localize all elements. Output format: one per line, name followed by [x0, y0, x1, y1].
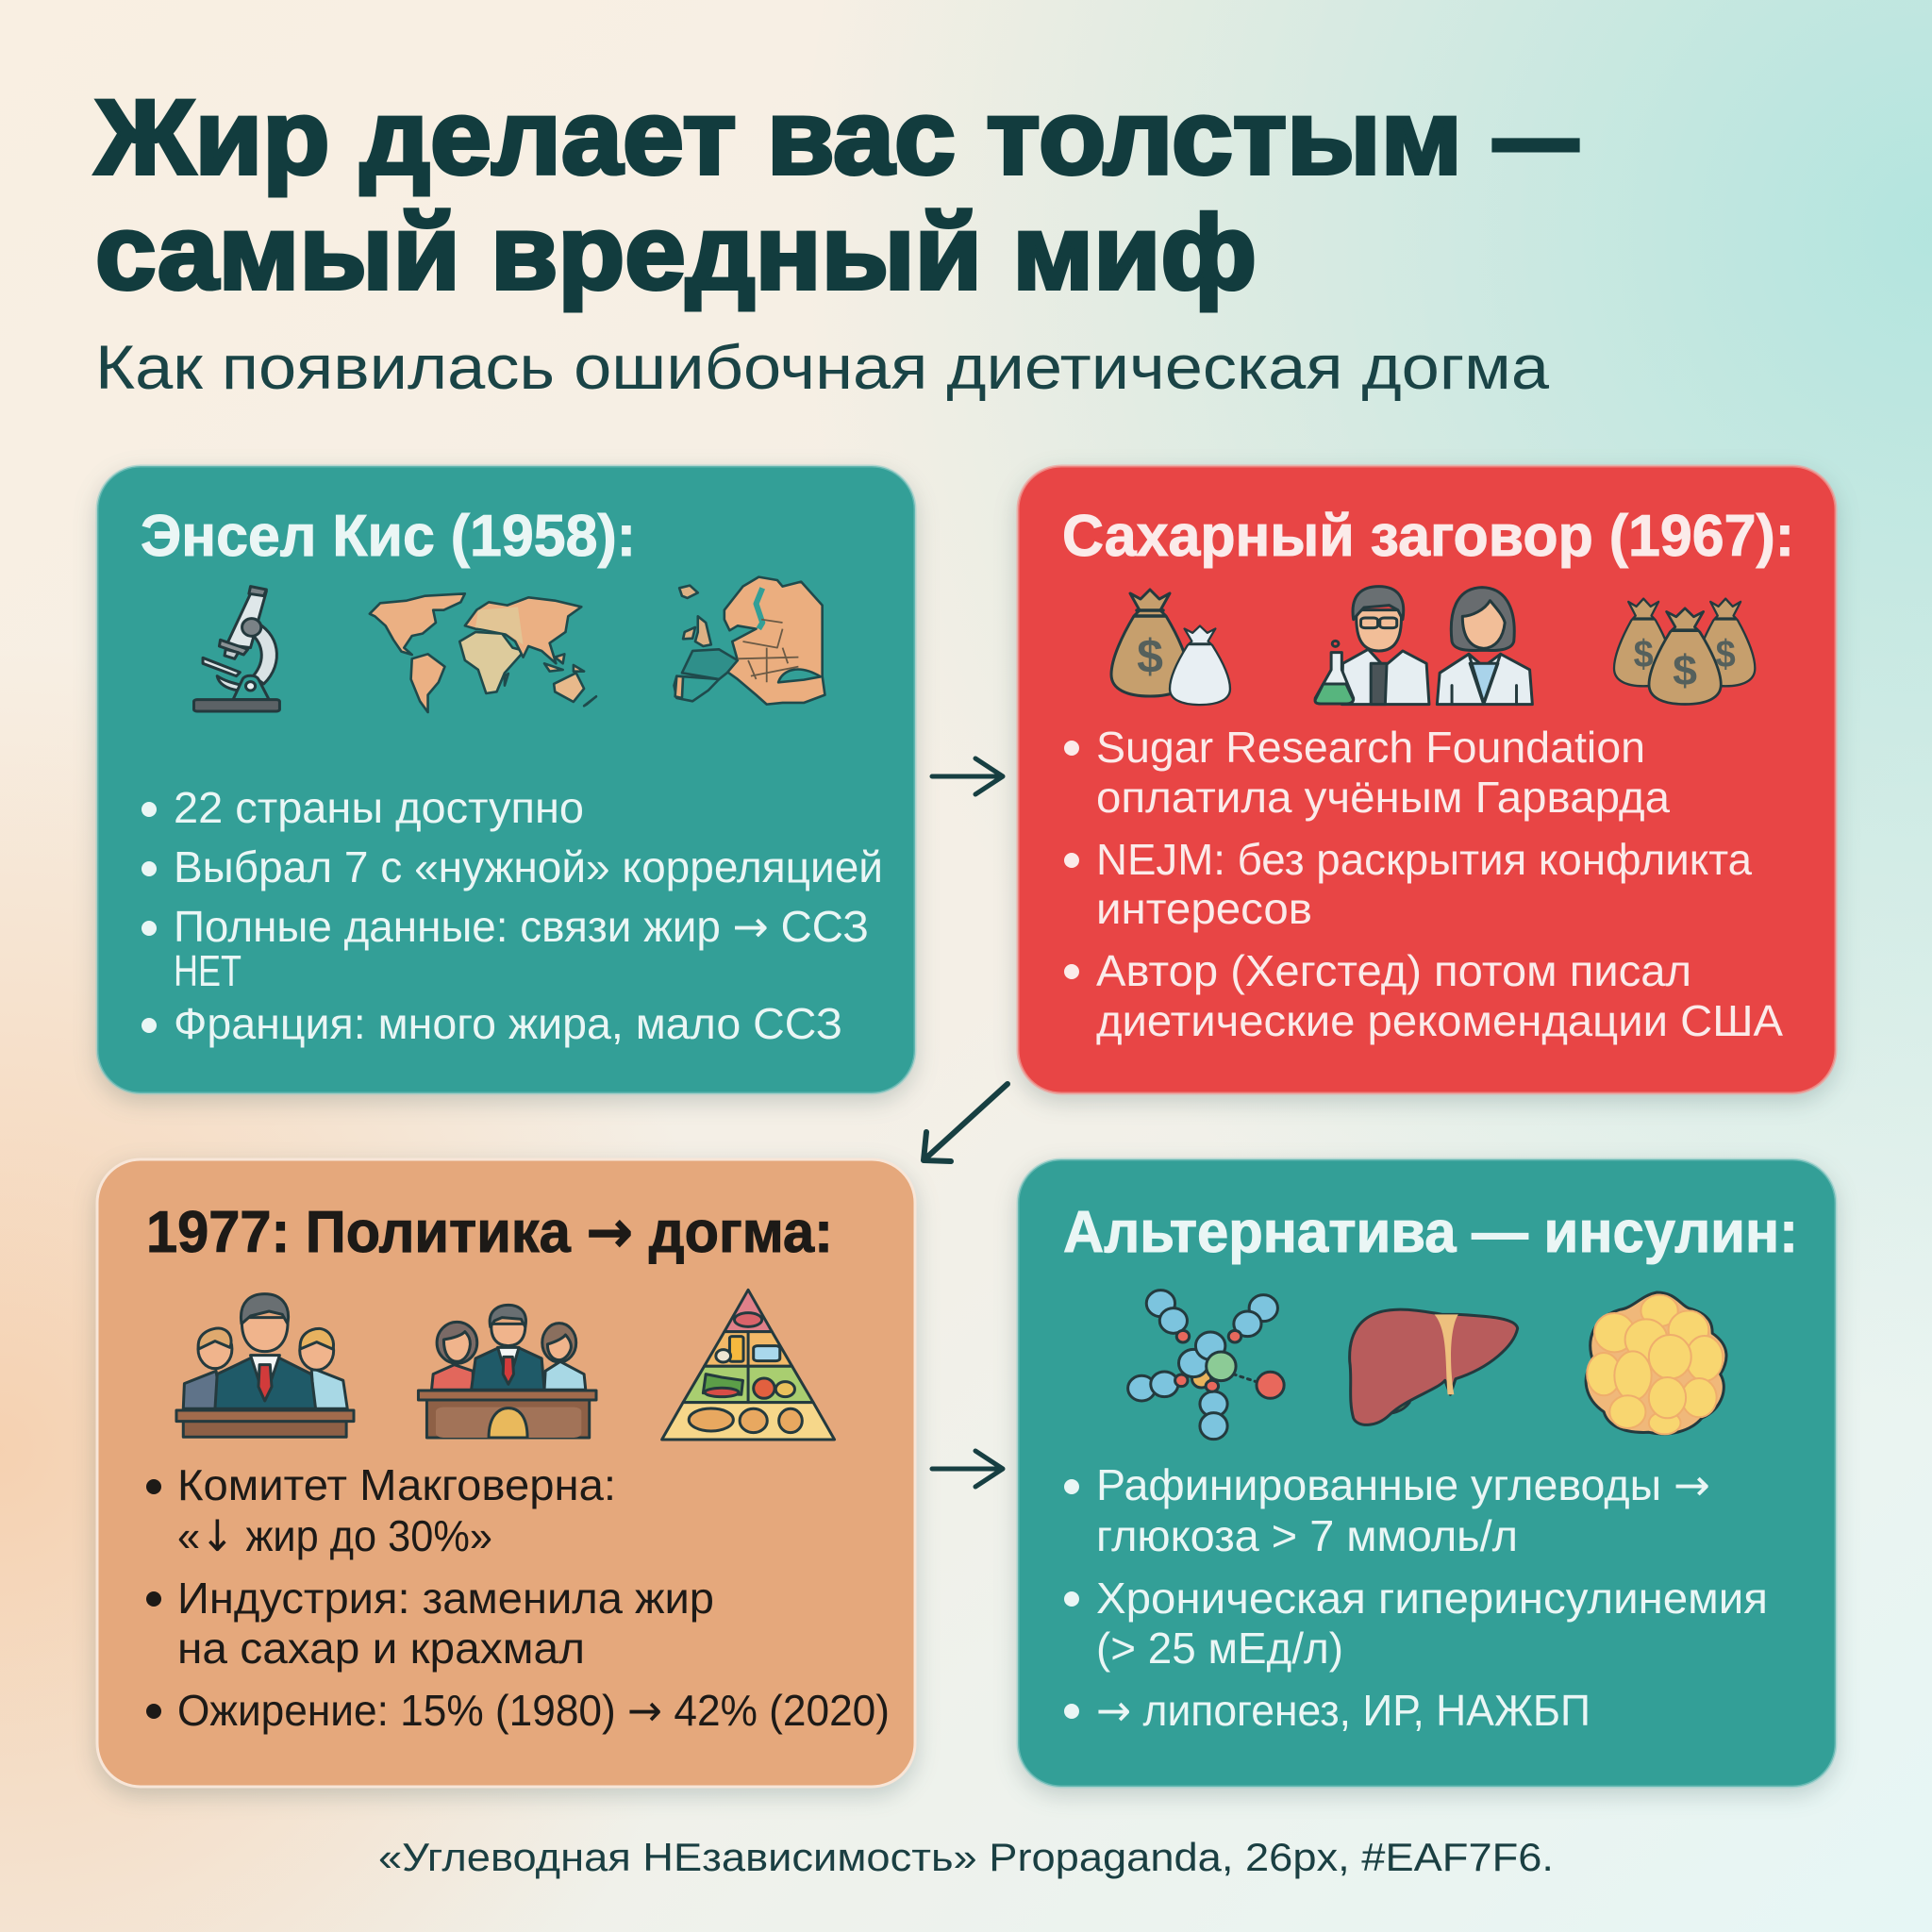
- bullet list: insulin alternative: Рафинированные углеводы →: [1096, 1459, 1710, 1510]
- bullet list: insulin alternative: → липогенез, ИР, НАЖБП: [1096, 1685, 1591, 1736]
- bullet list: Ancel Keys: НЕТ: [174, 946, 242, 995]
- title: Жир делает вас толстым: [94, 78, 1462, 196]
- panel: sugar conspiracy: [1018, 466, 1836, 1093]
- icon: committee of three: [176, 1294, 354, 1437]
- bullet list: 1977 politics: [146, 1460, 890, 1736]
- bullet list: sugar conspiracy: оплатила учёным Гарварда: [1096, 773, 1670, 822]
- arrow: first to second panel: [932, 758, 1003, 794]
- bullet list: sugar conspiracy: интересов: [1096, 884, 1312, 933]
- icon: three money bags: [1614, 599, 1755, 704]
- arrow: third to fourth panel: [932, 1451, 1003, 1487]
- heading: 1977 politics: 1977: Политика → догма:: [146, 1197, 833, 1266]
- arrow: second to third panel: [924, 1084, 1008, 1161]
- bullet list: 1977 politics: Ожирение: 15% (1980) → 42% (2020): [177, 1685, 890, 1736]
- bullet list: 1977 politics: Комитет Макговерна:: [177, 1460, 616, 1509]
- heading: sugar conspiracy: Сахарный заговор (1967):: [1062, 504, 1794, 569]
- bullet list: insulin alternative: (> 25 мЕд/л): [1096, 1624, 1343, 1673]
- bullet list: Ancel Keys: Франция: много жира, мало ССЗ: [174, 999, 842, 1048]
- bullet list: 1977 politics: «↓ жир до 30%»: [177, 1510, 492, 1561]
- icon: three money bags: $: [1634, 632, 1654, 675]
- panel: 1977 politics: [97, 1159, 915, 1787]
- subtitle: Как появилась ошибочная диетическая догма: [95, 332, 1549, 402]
- bullet list: sugar conspiracy: Автор (Хегстед) потом писал: [1096, 946, 1691, 995]
- bullet list: Ancel Keys: [142, 783, 883, 1048]
- bullet list: sugar conspiracy: NEJM: без раскрытия конфликта: [1096, 835, 1752, 884]
- icon: fat cells: [1586, 1292, 1726, 1434]
- icon: food pyramid: [662, 1290, 835, 1440]
- icon: world map: [370, 593, 596, 712]
- bullet list: Ancel Keys: Полные данные: связи жир → ССЗ: [174, 901, 869, 952]
- bullet list: sugar conspiracy: [1064, 723, 1783, 1045]
- title: —: [1493, 78, 1578, 196]
- icon: scientists: [1315, 587, 1532, 705]
- bullet list: insulin alternative: Хроническая гиперинсулинемия: [1096, 1574, 1768, 1623]
- icon: liver: [1350, 1309, 1518, 1424]
- title: [94, 78, 1578, 311]
- panel: Ancel Keys: [97, 466, 915, 1093]
- heading: Ancel Keys: Энсел Кис (1958):: [141, 504, 636, 569]
- bullet list: Ancel Keys: Выбрал 7 с «нужной» корреляцией: [174, 842, 883, 891]
- footer caption: «Углеводная НЕзависимость» Propaganda, 26px, #EAF7F6.: [378, 1835, 1554, 1879]
- icon: three money bags: $: [1716, 632, 1736, 675]
- panel: insulin alternative: [1018, 1159, 1836, 1787]
- bullet list: 1977 politics: Индустрия: заменила жир: [177, 1574, 714, 1623]
- icon: three money bags: $: [1673, 646, 1697, 694]
- icon: Europe map: [675, 577, 824, 705]
- icon: insulin molecule: [1128, 1291, 1284, 1440]
- icon: hearing panel at podium: [418, 1305, 596, 1438]
- icon: money bag and sugar bag: [1111, 590, 1230, 705]
- title: самый вредный миф: [95, 193, 1257, 311]
- bullet list: sugar conspiracy: Sugar Research Foundation: [1096, 723, 1645, 772]
- bullet list: 1977 politics: на сахар и крахмал: [177, 1624, 585, 1673]
- bullet list: insulin alternative: глюкоза > 7 ммоль/л: [1096, 1511, 1518, 1560]
- heading: insulin alternative: Альтернатива — инсулин:: [1063, 1200, 1798, 1265]
- bullet list: Ancel Keys: 22 страны доступно: [174, 783, 584, 832]
- bullet list: insulin alternative: [1064, 1459, 1768, 1736]
- icon: money bag and sugar bag: $: [1137, 630, 1163, 683]
- icon: microscope: [194, 587, 279, 711]
- bullet list: sugar conspiracy: диетические рекомендации США: [1096, 996, 1783, 1045]
